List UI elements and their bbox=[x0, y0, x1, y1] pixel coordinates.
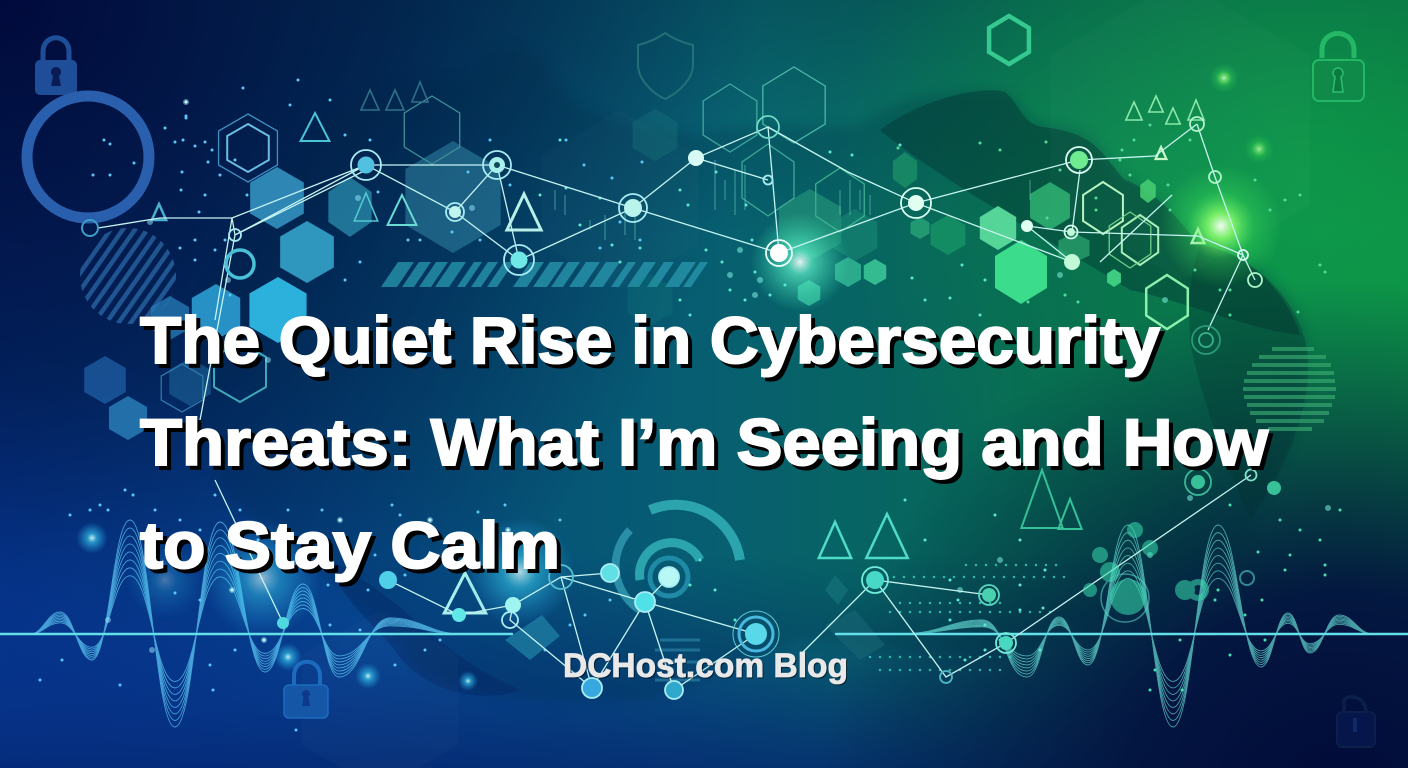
icon: lock top left bbox=[35, 38, 77, 95]
icon: lock bottom centre bbox=[284, 662, 328, 718]
title: The Quiet Rise in Cybersecurity bbox=[140, 303, 1160, 377]
diamond shapes bottom bbox=[505, 575, 885, 660]
network nodes: blue-cyan bbox=[82, 116, 792, 699]
target rings bottom centre bbox=[616, 505, 740, 680]
blog label: DCHost.com Blog bbox=[563, 647, 848, 685]
vertical tick marks bbox=[555, 160, 1030, 240]
network nodes: green field bbox=[862, 117, 1281, 683]
right waveform bbox=[900, 525, 1373, 727]
horizontal signal lines bbox=[0, 632, 1408, 636]
green blobs bottom right bbox=[1083, 522, 1254, 622]
hatched circle right bbox=[1243, 349, 1336, 429]
particle dots: teal field bbox=[540, 125, 1340, 690]
left waveform bbox=[31, 520, 462, 727]
hexagon outlines bbox=[161, 67, 1188, 412]
icon: large ring bbox=[27, 96, 149, 218]
glow spots bbox=[76, 63, 1283, 691]
hatched circle bbox=[80, 228, 176, 324]
dark organic blob backdrop bbox=[190, 48, 1308, 702]
filled hexagons centre and right bbox=[779, 152, 1156, 306]
triangle outlines bbox=[152, 82, 1204, 613]
title bbox=[140, 303, 1269, 582]
icon: top hexagon outline bbox=[989, 16, 1029, 64]
particle dots: blue field bbox=[40, 80, 642, 730]
diagonal stripes bar bbox=[381, 262, 708, 287]
title: Threats: What I’m Seeing and How bbox=[140, 405, 1269, 479]
network lines bbox=[98, 124, 1255, 690]
filled hexagons left bbox=[84, 109, 678, 440]
icon: shield outline bbox=[638, 33, 693, 99]
icon: lock top right bbox=[1313, 34, 1364, 101]
icon: lock bottom right bbox=[1337, 697, 1375, 747]
title: to Stay Calm bbox=[140, 508, 560, 582]
dotted data grid bbox=[870, 565, 1065, 670]
faint large background hexagons bbox=[302, 0, 1310, 768]
